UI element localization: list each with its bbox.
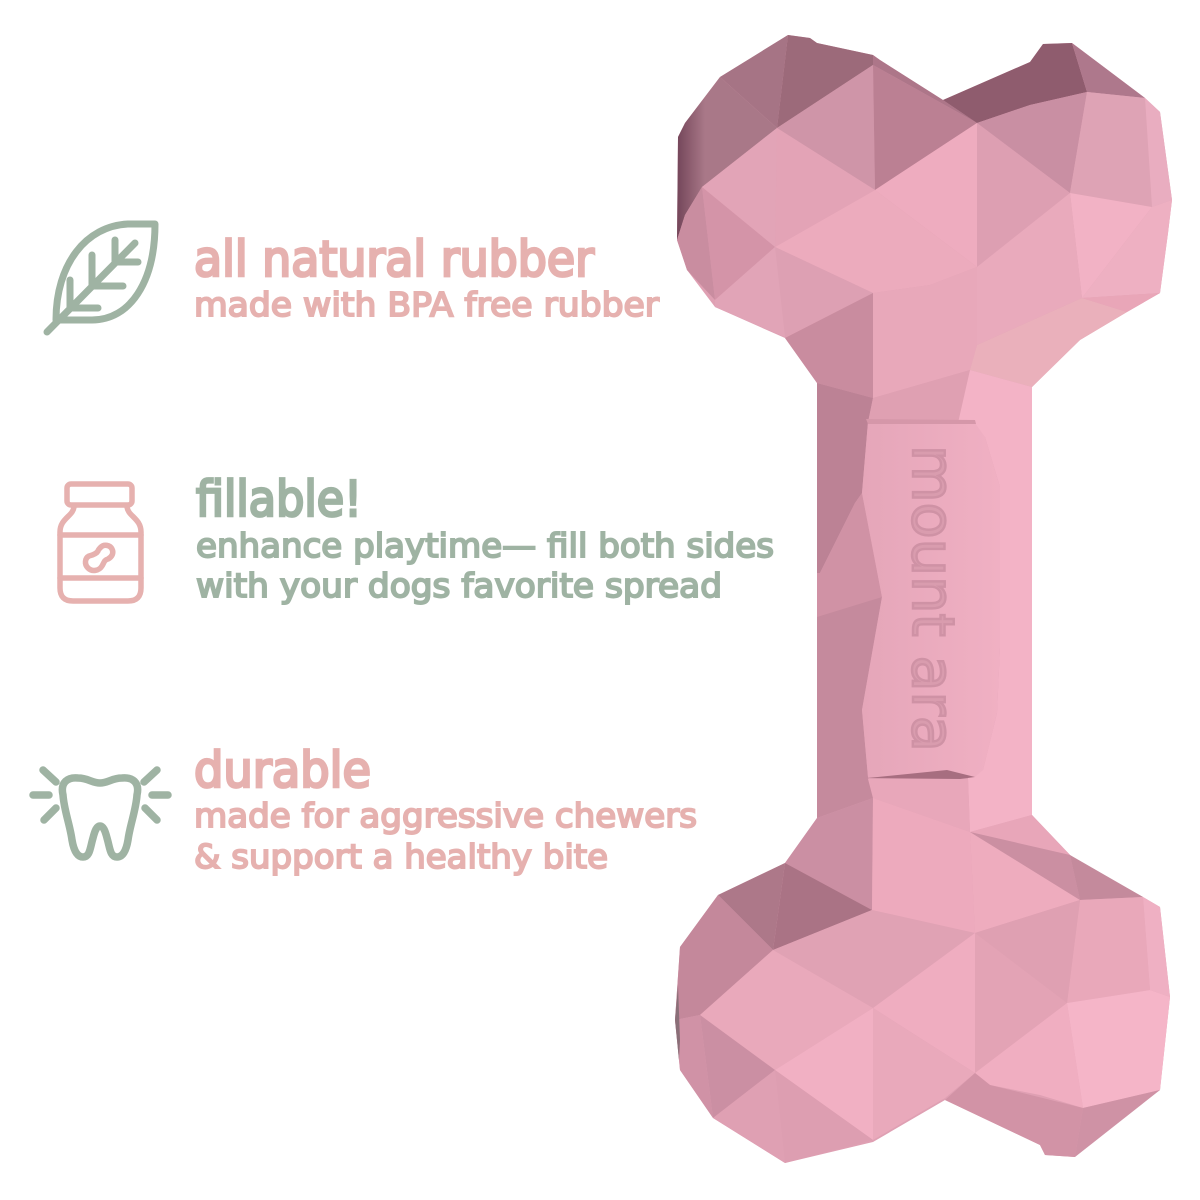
description: with your dogs favorite spread (196, 566, 722, 605)
heading: fillable! (196, 471, 362, 528)
feature: fillable (60, 471, 774, 605)
description (194, 796, 697, 876)
lower bone head facets (675, 779, 1170, 1163)
icon: leaf (47, 224, 155, 332)
description: made for aggressive chewers (194, 796, 697, 835)
feature: all natural rubber (47, 224, 659, 332)
center label panel (862, 419, 1000, 779)
icon: tooth with rays (33, 770, 168, 857)
product: pink geometric rubber bone (675, 35, 1172, 1163)
description (196, 526, 774, 605)
bone silhouette (675, 35, 1172, 1163)
upper bone head facets (677, 35, 1172, 398)
description: & support a healthy bite (194, 837, 608, 876)
embossed brand name: mount ara: mount ara (899, 445, 967, 752)
heading: all natural rubber (194, 231, 595, 288)
icon: peanut butter jar (60, 484, 141, 601)
description: enhance playtime— fill both sides (196, 526, 774, 565)
bone shaft (817, 370, 1032, 832)
feature: durable (33, 742, 697, 876)
description: made with BPA free rubber (194, 285, 659, 324)
heading: durable (194, 742, 371, 799)
